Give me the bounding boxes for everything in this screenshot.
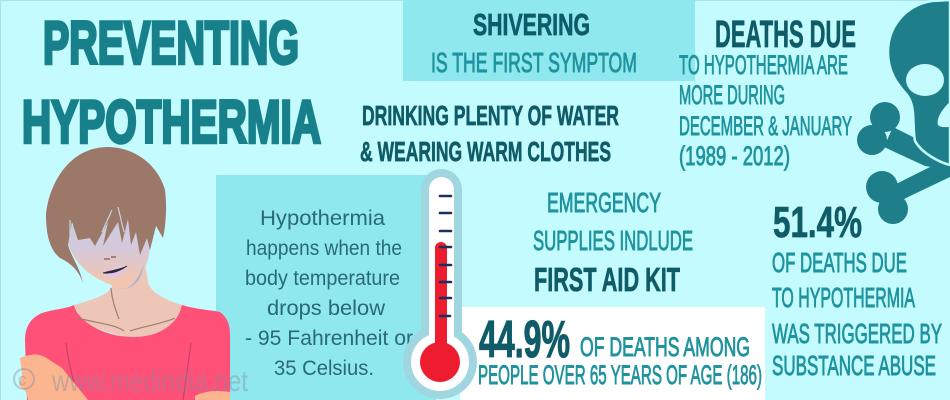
shivering text: SHIVERING bbox=[473, 7, 590, 42]
44.9% statistic: 44.9% bbox=[479, 311, 570, 369]
drinking water text: DRINKING PLENTY OF WATER bbox=[362, 100, 619, 131]
neck and chest bbox=[74, 258, 182, 340]
icon: thermometer bbox=[403, 169, 477, 399]
panel: hypothermia definition bbox=[216, 175, 436, 400]
deaths due text: (1989 - 2012) bbox=[679, 141, 790, 171]
definition paragraph: drops below bbox=[267, 297, 386, 320]
deaths due text bbox=[679, 14, 856, 171]
51.4% statistic: 51.4% bbox=[773, 198, 862, 247]
emergency supplies text: SUPPLIES INDLUDE bbox=[533, 225, 693, 256]
44.9% statistic bbox=[478, 311, 762, 390]
definition paragraph: body temperature bbox=[245, 267, 400, 290]
drinking water text: & WEARING WARM CLOTHES bbox=[360, 136, 611, 167]
shirt bbox=[25, 305, 230, 400]
watermark: c bbox=[18, 370, 27, 389]
emergency supplies text: FIRST AID KIT bbox=[534, 261, 680, 298]
panel: 44.9% statistic background bbox=[460, 307, 765, 400]
nose bbox=[104, 257, 116, 259]
definition paragraph bbox=[245, 207, 413, 380]
right hand bbox=[195, 391, 230, 400]
left arm and hand bbox=[19, 354, 88, 400]
definition paragraph: Hypothermia bbox=[260, 207, 385, 230]
face bbox=[66, 200, 155, 286]
hair fringe strands bbox=[70, 207, 124, 238]
title: PREVENTING bbox=[43, 10, 299, 76]
emergency supplies text: EMERGENCY bbox=[547, 187, 661, 218]
51.4% statistic bbox=[772, 198, 942, 381]
panel: shivering background bbox=[403, 0, 695, 81]
watermark bbox=[14, 365, 249, 398]
drinking water text bbox=[360, 100, 619, 167]
deaths due text: MORE DURING bbox=[679, 80, 785, 110]
44.9% statistic: OF DEATHS AMONG bbox=[580, 332, 750, 362]
emergency supplies text bbox=[533, 187, 693, 298]
hair bbox=[46, 147, 166, 283]
icon: skull and crossbones bbox=[857, 0, 950, 224]
neck shadow bbox=[118, 264, 144, 289]
definition paragraph: - 95 Fahrenheit or bbox=[245, 327, 413, 350]
collar lines bbox=[78, 288, 175, 331]
lips bbox=[102, 264, 127, 277]
title: HYPOTHERMIA bbox=[22, 88, 321, 156]
title bbox=[22, 10, 321, 156]
shirt folds bbox=[66, 343, 191, 400]
watermark: www.medindia.net bbox=[51, 365, 249, 398]
shivering text: IS THE FIRST SYMPTOM bbox=[431, 47, 637, 78]
illustration: woman bbox=[19, 147, 230, 400]
definition paragraph: 35 Celsius. bbox=[274, 357, 374, 380]
definition paragraph: happens when the bbox=[246, 237, 402, 260]
shivering text bbox=[431, 7, 637, 78]
